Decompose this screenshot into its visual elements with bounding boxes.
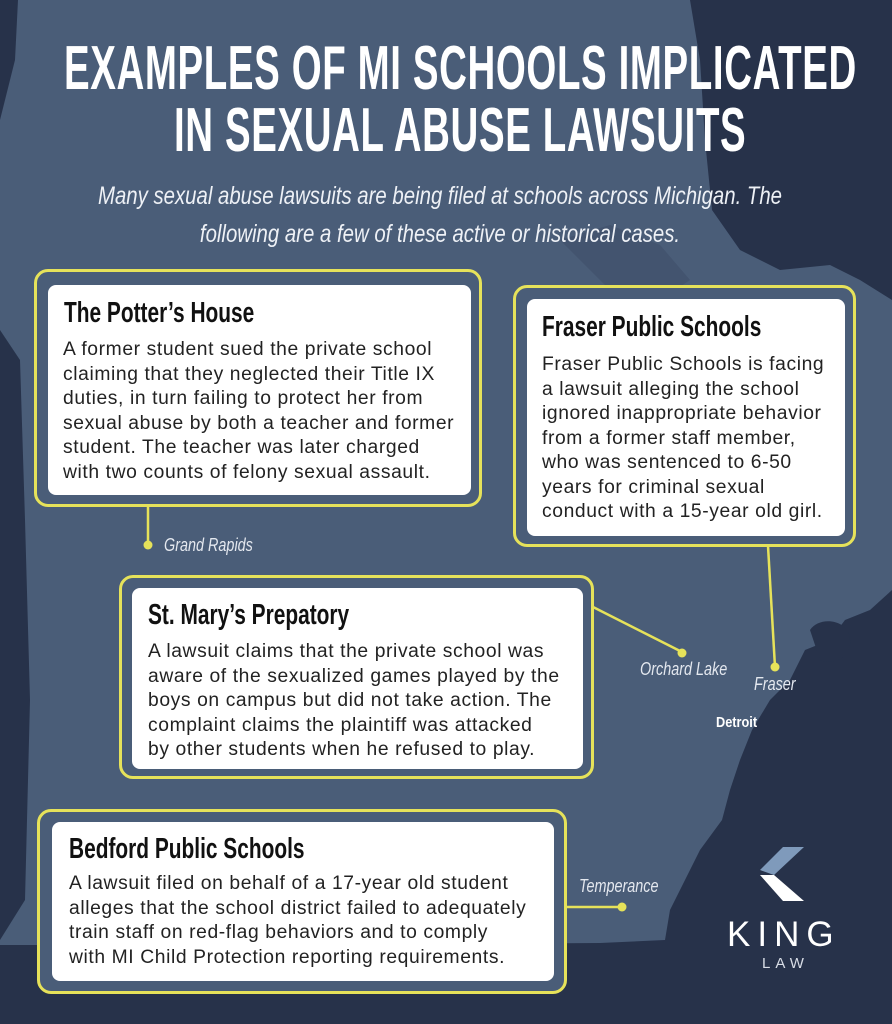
panel: St. Mary's Preparatory: A lawsuit claims that the private school was [148,641,544,662]
city labels: Grand Rapids [164,535,253,555]
panel: St. Mary's Preparatory [119,575,594,779]
panel: Bedford Public Schools: with MI Child Protection reporting requirements. [69,946,505,968]
logo: King Law [727,847,841,972]
panel: Fraser Public Schools: ignored inappropriate behavior [542,403,822,424]
title [64,34,857,165]
panel: Fraser Public Schools [513,285,856,547]
text: with two counts of felony sexual assault. [63,462,431,482]
panel: St. Mary's Preparatory: complaint claims the plaintiff was attacked [148,714,532,736]
panel: Fraser Public Schools: a lawsuit alleging the school [542,378,800,400]
panel: St. Mary's Preparatory: boys on campus but did not take action. The [148,690,552,711]
panel: Fraser Public Schools: Fraser Public Schools is facing [542,354,824,375]
heading: The Potter’s House [64,297,254,329]
text: sexual abuse by both a teacher and former [63,412,454,434]
text: Orchard Lake [640,659,727,679]
icon: chevron [760,847,804,901]
text: Fraser [754,674,796,694]
panel: St. Mary's Preparatory: aware of the sexualized games played by the [148,666,560,686]
logo: King Law: KING [727,915,841,954]
panel: St. Mary's Preparatory: by other students when he refused to play. [148,739,535,760]
panel: The Potter's House [34,269,482,507]
text: student. The teacher was later charged [63,437,420,458]
panel: Fraser Public Schools: Fraser Public Schools [542,311,761,343]
subtitle: following are a few of these active or historical cases. [200,220,680,248]
text: duties, in turn failing to protect her from [63,388,423,409]
title: EXAMPLES OF MI SCHOOLS IMPLICATED [64,34,857,103]
panel: Fraser Public Schools: years for criminal sexual [542,476,765,498]
text: Temperance [579,876,659,896]
panel: Bedford Public Schools [37,809,567,994]
panel: Bedford Public Schools: alleges that the school district failed to adequately [69,898,526,918]
panel: Bedford Public Schools: Bedford Public Schools [69,833,305,865]
panel: Fraser Public Schools: conduct with a 15-year old girl. [542,501,823,522]
title: IN SEXUAL ABUSE LAWSUITS [174,96,746,165]
subtitle: Many sexual abuse lawsuits are being filed at schools across Michigan. The [98,182,782,210]
panel: Fraser Public Schools: who was sentenced to 6-50 [542,452,792,473]
logo: King Law: LAW [762,955,809,972]
subtitle [98,182,782,248]
text: Detroit [716,714,757,731]
panel: St. Mary's Preparatory: St. Mary’s Prepatory [148,599,349,631]
panel: Bedford Public Schools: train staff on red-flag behaviors and to comply [69,922,488,943]
text [63,339,454,482]
panel: Fraser Public Schools: from a former staff member, [542,428,796,448]
text: A former student sued the private school [63,339,432,360]
text: claiming that they neglected their Title IX [63,364,435,384]
panel: Bedford Public Schools: A lawsuit filed on behalf of a 17-year old student [69,873,508,894]
